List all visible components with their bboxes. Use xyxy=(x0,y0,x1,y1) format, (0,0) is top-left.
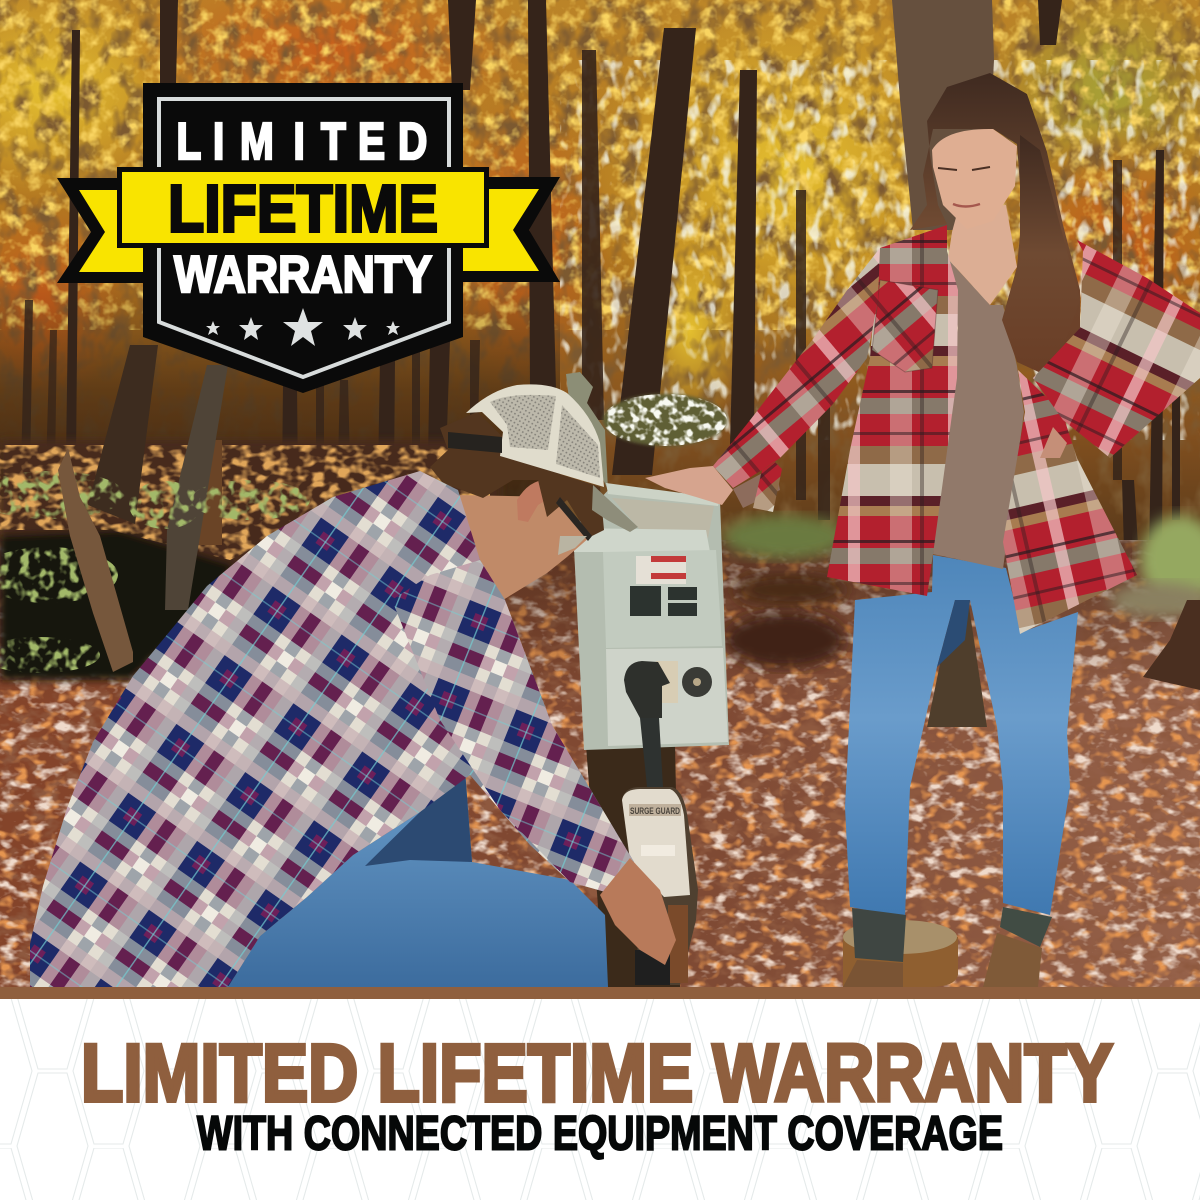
man plaid shirt xyxy=(30,471,634,987)
man neck and face xyxy=(455,495,590,600)
man sleeve xyxy=(392,560,634,895)
woman jeans xyxy=(845,555,1078,917)
big trunks left xyxy=(88,345,228,610)
five stars xyxy=(206,308,400,346)
bottom banner xyxy=(0,987,1200,1200)
man ear xyxy=(517,480,552,522)
green shrubs left xyxy=(0,471,310,673)
tree root right xyxy=(1143,600,1200,690)
badge word: limited: LIMITED xyxy=(177,112,427,170)
flowering shrub xyxy=(603,394,727,446)
finial behind box xyxy=(566,372,608,490)
forest canopy background xyxy=(0,0,1200,720)
man xyxy=(30,384,676,987)
woman right shirt panel xyxy=(1003,370,1137,634)
woman chest and neck xyxy=(948,205,1017,305)
warranty badge xyxy=(57,83,560,393)
woman right sock xyxy=(1000,907,1052,947)
woman shirt underlayer top xyxy=(933,259,1024,569)
ribbon tail right xyxy=(455,177,560,282)
badge word: warranty: WARRANTY xyxy=(174,246,432,304)
large tree behind woman xyxy=(892,0,994,230)
woman eyes and lips xyxy=(938,167,990,206)
cap crown xyxy=(466,384,604,487)
banner white hexagon background xyxy=(0,998,1200,1200)
door panel xyxy=(603,550,722,648)
brown divider bar xyxy=(0,987,1200,999)
woman xyxy=(645,73,1200,987)
surge guard label: SURGE GUARD xyxy=(630,806,680,816)
woman left boot xyxy=(843,960,903,987)
woman left sleeve xyxy=(713,248,880,512)
woman breast pocket xyxy=(872,280,938,372)
warning sticker xyxy=(636,556,686,584)
man glasses xyxy=(556,497,592,555)
woman hair xyxy=(910,73,1080,374)
woman hand on hip xyxy=(1040,427,1067,458)
woman hand on box xyxy=(645,466,733,505)
upper compartment xyxy=(574,528,710,552)
woman left sock xyxy=(852,908,906,962)
plug xyxy=(624,661,670,718)
ribbon center yellow xyxy=(122,172,484,243)
forest floor xyxy=(0,540,1200,990)
woman face xyxy=(932,129,1017,229)
ribbon center black xyxy=(117,167,489,248)
trunk behind woman lower xyxy=(927,600,987,727)
shield inner outline xyxy=(159,99,449,377)
surge protector xyxy=(622,787,698,985)
cap strap xyxy=(448,432,502,453)
man jeans xyxy=(228,770,608,987)
woman right sleeve xyxy=(1033,240,1200,458)
green undergrowth right xyxy=(723,515,1200,668)
open lid flange xyxy=(606,483,720,506)
man hand xyxy=(600,858,676,965)
shield xyxy=(143,83,463,393)
electrical pedestal box xyxy=(573,483,729,787)
outlet panel xyxy=(606,648,728,746)
leaf litter band xyxy=(0,445,490,560)
box body xyxy=(573,486,729,750)
woman left shirt panel xyxy=(827,225,958,596)
30A receptacle xyxy=(682,667,712,697)
man hair xyxy=(430,412,604,537)
badge word: lifetime: LIFETIME xyxy=(168,172,438,246)
fallen stump left xyxy=(58,448,133,672)
cut stump under woman xyxy=(843,920,958,987)
power pedestal post xyxy=(586,745,680,987)
lid inner xyxy=(612,498,714,538)
background tree trunks xyxy=(21,0,1180,625)
ribbon tail left xyxy=(57,178,151,283)
cap bill xyxy=(592,485,638,532)
woman sleeve tan cuff xyxy=(733,466,780,508)
breakers xyxy=(630,586,697,616)
cord xyxy=(640,718,663,787)
woman right boot xyxy=(983,933,1042,987)
subheadline: WITH CONNECTED EQUIPMENT COVERAGE xyxy=(197,1108,1003,1160)
GFCI outlet xyxy=(656,661,678,703)
undergrowth left xyxy=(0,440,500,680)
